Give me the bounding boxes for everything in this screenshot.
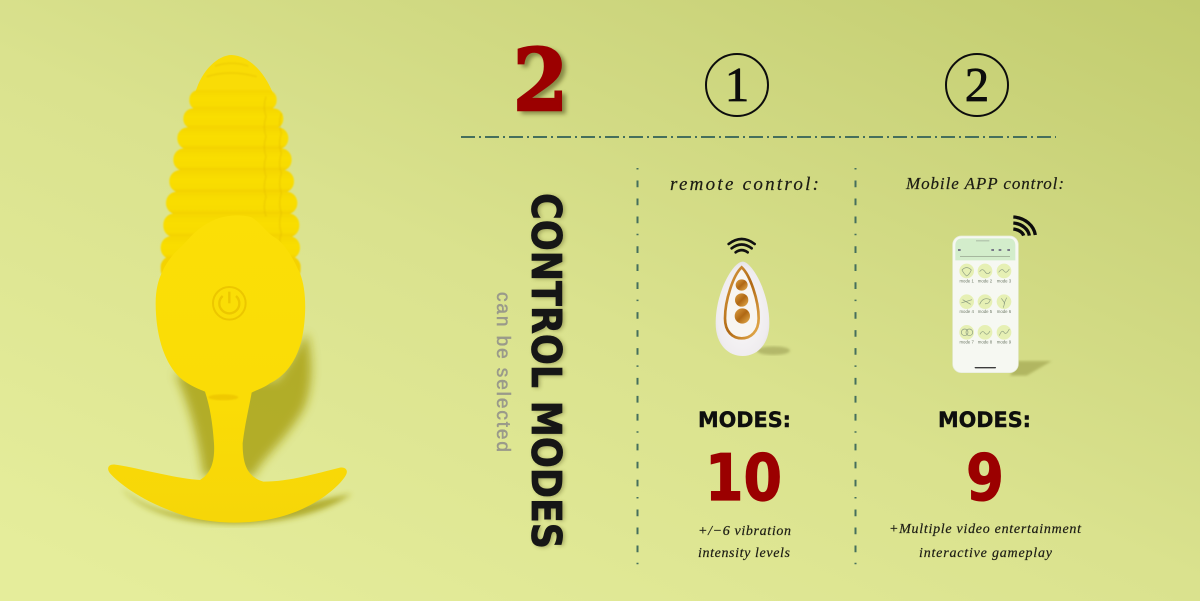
column heading: remote control: remote control: xyxy=(670,174,819,195)
phone frame xyxy=(953,236,1018,373)
mode icons grid xyxy=(959,264,1011,340)
icon: wifi xyxy=(729,239,755,252)
numbered circle 2: 2 xyxy=(965,57,989,112)
note: remote intensity levels: intensity levels xyxy=(698,546,791,561)
phone shadow xyxy=(1010,361,1052,376)
product photo: yellow corn-shaped device xyxy=(108,55,352,524)
kernel ribs xyxy=(161,90,301,280)
numbered circle 1 xyxy=(706,54,768,116)
column heading: mobile app control: Mobile APP control: xyxy=(905,174,1064,193)
icon: remote control with wifi signal xyxy=(716,239,790,356)
vertical heading: control modes: CONTROL MODES xyxy=(522,193,570,549)
remote buttons xyxy=(736,279,748,291)
modes label: app: MODES: xyxy=(938,408,1031,432)
power button icon xyxy=(213,287,246,320)
vertical subheading: can be selected: can be selected xyxy=(492,292,513,452)
mode labels: mode 9 xyxy=(997,340,1012,345)
icon: wifi xyxy=(1013,217,1035,236)
large number 2: 2 xyxy=(517,34,572,134)
mode labels xyxy=(959,278,1012,345)
mode labels: mode 2 xyxy=(978,278,993,283)
large number 2: 2 xyxy=(513,31,568,131)
remote shadow xyxy=(757,346,790,355)
icon: phone with app screen xyxy=(953,217,1052,376)
note: app entertainment xyxy=(889,522,1082,561)
corn tip xyxy=(195,55,273,93)
modes label: remote: MODES: xyxy=(698,408,791,432)
flange shadow xyxy=(122,488,352,524)
vertical heading: control modes: CONTROL MODES xyxy=(524,194,572,550)
horizontal dash-dot divider xyxy=(461,136,1056,138)
note: app entertainment: +Multiple video entertainment xyxy=(889,522,1082,537)
mode labels: mode 1 xyxy=(959,278,974,283)
body shadow xyxy=(175,333,311,477)
kernel column shading xyxy=(207,63,281,253)
mode labels: mode 7 xyxy=(959,340,974,345)
mode labels: mode 3 xyxy=(997,278,1012,283)
mode labels: mode 4 xyxy=(959,309,974,314)
note: app entertainment: interactive gameplay xyxy=(919,546,1053,561)
gold teardrop ring xyxy=(725,267,759,338)
remote body xyxy=(716,262,769,356)
mode labels: mode 5 xyxy=(978,309,993,314)
body and flange xyxy=(108,215,347,523)
neck collar shade xyxy=(208,394,238,400)
numbered circle 2 xyxy=(946,54,1008,116)
value: 9 modes: 9 xyxy=(966,442,1004,516)
note: remote intensity levels: +/−6 vibration xyxy=(698,524,791,539)
app header xyxy=(955,238,1015,260)
mode labels: mode 6 xyxy=(997,309,1012,314)
numbered circle 1: 1 xyxy=(725,57,749,112)
mode labels: mode 8 xyxy=(978,340,993,345)
note: remote intensity levels xyxy=(698,524,791,561)
value: 10 modes: 10 xyxy=(705,442,782,516)
home bar xyxy=(975,367,996,368)
